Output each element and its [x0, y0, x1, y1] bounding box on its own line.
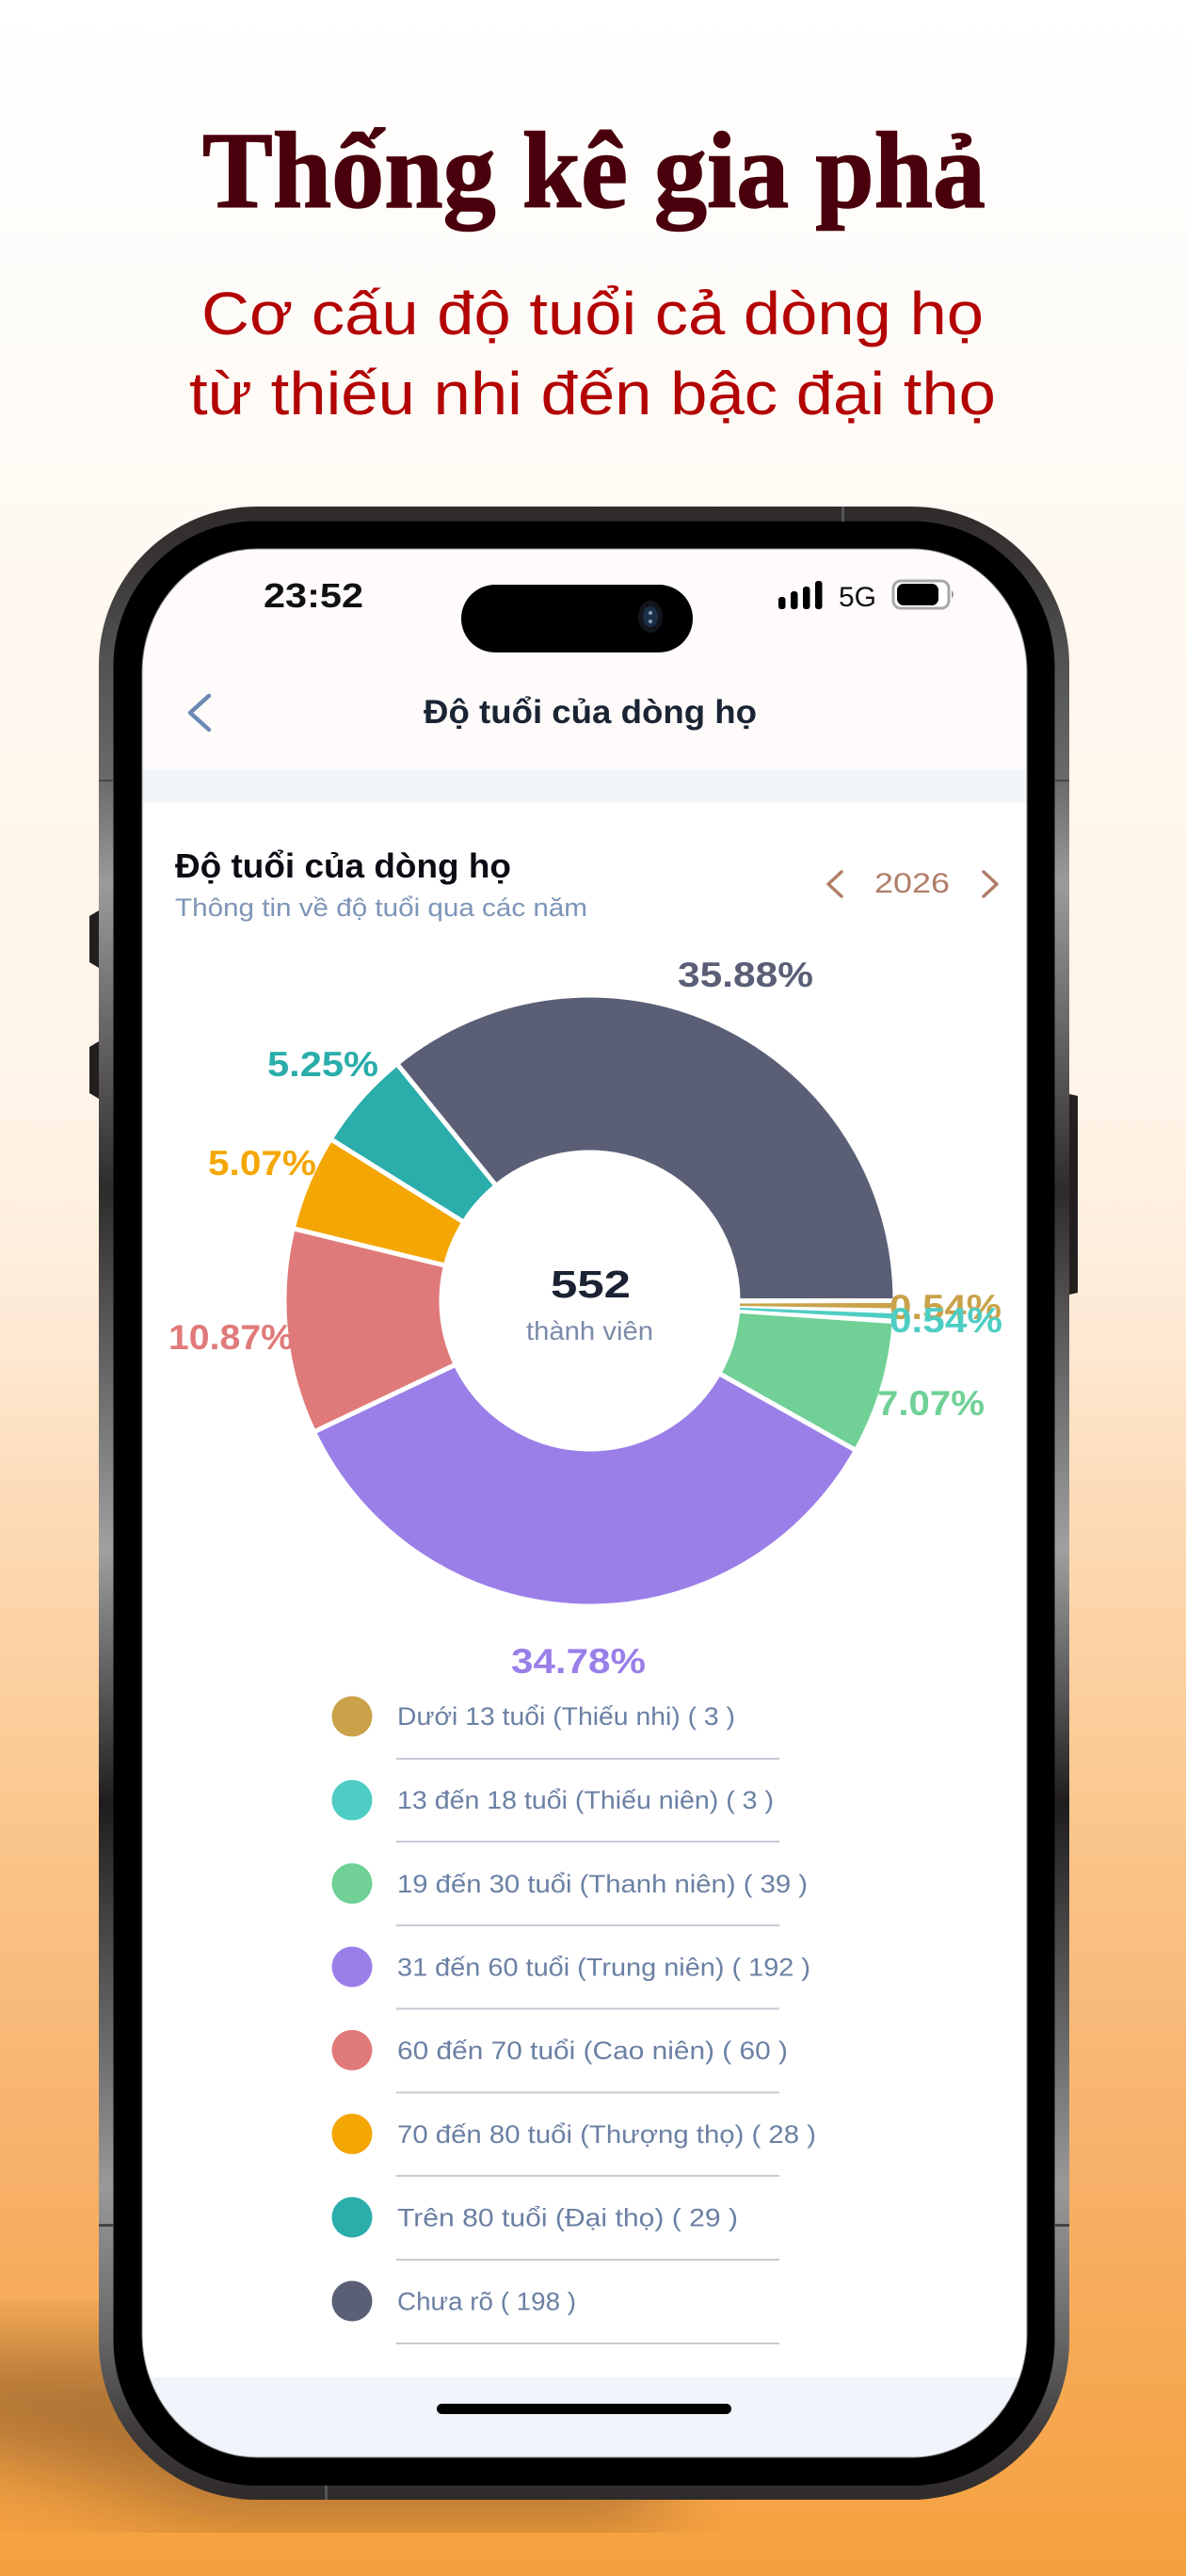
legend item: unknown: [331, 2280, 779, 2344]
chart percentage labels: 0.54%: [890, 1288, 1002, 1327]
slice: 13 to 18: [740, 1308, 892, 1318]
screen title: Độ tuổi của dòng họ: [424, 694, 757, 731]
year selector: [828, 868, 997, 899]
slice: 60 to 70: [284, 1229, 456, 1432]
legend item: 31 to 60: 31 đến 60 tuổi (Trung niên) ( 192 ): [397, 1953, 810, 1981]
slice: 31 to 60: [313, 1364, 856, 1606]
legend item: 31 to 60: [331, 1947, 810, 2009]
phone drop shadow: [0, 2349, 659, 2519]
subtitle: [189, 280, 996, 427]
subtitle: từ thiếu nhi đến bậc đại thọ: [189, 360, 996, 427]
side buttons: [89, 910, 1078, 1295]
chart percentage labels: 10.87%: [168, 1318, 294, 1357]
slice: 70 to 80: [293, 1139, 464, 1265]
legend item: under 13: Dưới 13 tuổi (Thiếu nhi) ( 3 ): [397, 1702, 735, 1731]
header background: [142, 549, 1027, 769]
chart percentage labels: 0.54%: [890, 1301, 1002, 1340]
network label: 5G: [839, 582, 876, 613]
legend item: over 80: Trên 80 tuổi (Đại thọ) ( 29 ): [397, 2203, 738, 2231]
legend item: 70 to 80: 70 đến 80 tuổi (Thượng thọ) ( 28 ): [397, 2120, 816, 2149]
legend item: 19 to 30: [331, 1863, 808, 1926]
chart percentage labels: 5.25%: [267, 1045, 378, 1084]
navigation bar: [190, 694, 757, 731]
legend item: under 13: [331, 1697, 779, 1760]
title: Thống kê gia phả: [202, 111, 986, 232]
slice: 19 to 30: [719, 1311, 894, 1451]
chart percentage labels: 5.07%: [208, 1144, 316, 1183]
slice: unknown: [397, 995, 895, 1301]
chart percentage labels: 7.07%: [877, 1384, 985, 1423]
slice: over 80: [330, 1064, 496, 1222]
year selector: 2026: [874, 868, 950, 899]
legend: [331, 1697, 816, 2344]
metal frame: [99, 507, 1069, 2500]
subtitle: Cơ cấu độ tuổi cả dòng họ: [201, 280, 984, 347]
frame seams: [99, 507, 1069, 2500]
clock: 23:52: [264, 576, 363, 615]
header separator band: [142, 769, 1027, 802]
screen edge: [142, 549, 1027, 2457]
bottom bar: [142, 2377, 1027, 2457]
icon: battery: [893, 581, 954, 608]
donut centre total: 552: [551, 1263, 631, 1306]
chart percentage labels: 35.88%: [678, 956, 813, 994]
legend item: 60 to 70: [331, 2030, 788, 2094]
card title: Độ tuổi của dòng họ: [175, 846, 511, 885]
screen: [142, 549, 1027, 2457]
black bezel: [113, 522, 1054, 2486]
icon: signal: [778, 581, 823, 609]
slice: under 13: [740, 1303, 892, 1309]
legend item: unknown: Chưa rõ ( 198 ): [397, 2288, 576, 2316]
legend item: 60 to 70: 60 đến 70 tuổi (Cao niên) ( 60 ): [397, 2037, 788, 2065]
donut centre total: [526, 1263, 653, 1345]
card subtitle: Thông tin về độ tuổi qua các năm: [175, 894, 587, 922]
phone mockup: [89, 507, 1078, 2500]
legend item: 70 to 80: [331, 2114, 816, 2177]
icon: back chevron: [190, 696, 209, 730]
legend item: 13 to 18: 13 đến 18 tuổi (Thiếu niên) ( 3 ): [397, 1786, 774, 1814]
legend item: over 80: [331, 2198, 779, 2261]
dynamic island: [461, 585, 693, 652]
donut chart: [284, 995, 895, 1606]
donut centre total: thành viên: [526, 1316, 653, 1345]
card header: [175, 846, 997, 922]
chart percentage labels: 34.78%: [511, 1642, 646, 1681]
legend item: 13 to 18: [331, 1779, 779, 1843]
chart percentage labels: [168, 956, 1002, 1681]
home indicator: [437, 2404, 731, 2414]
legend item: 19 to 30: 19 đến 30 tuổi (Thanh niên) ( 39 ): [397, 1870, 808, 1898]
status bar: [264, 576, 954, 652]
